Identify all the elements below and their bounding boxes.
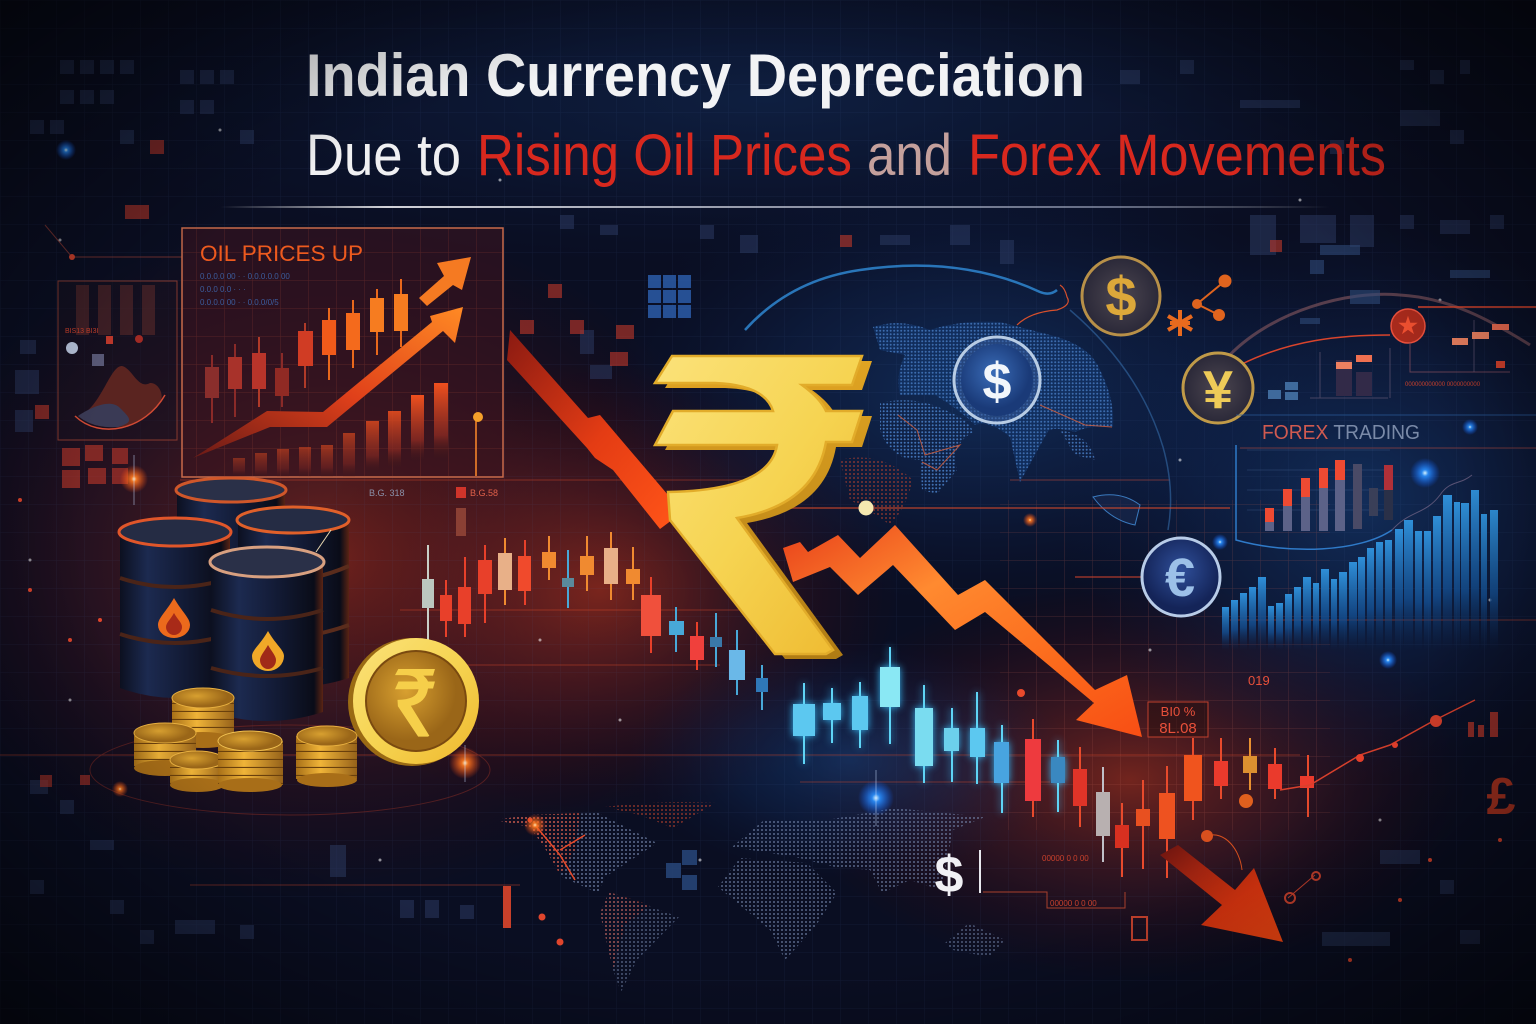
title xyxy=(306,42,1386,188)
panel: small mountain chart xyxy=(58,281,177,440)
barrel: left xyxy=(119,518,231,698)
icon: network nodes xyxy=(1168,274,1232,336)
red data column xyxy=(503,886,511,928)
rupee glyph on coin xyxy=(395,669,435,737)
continent: eurasia xyxy=(873,322,1113,482)
title line 2 xyxy=(306,123,1386,188)
stack xyxy=(170,751,224,792)
panel: red data tables xyxy=(1268,245,1510,400)
icon: red alert badge xyxy=(1391,307,1536,343)
continent: africa xyxy=(880,400,973,494)
title line 2: and xyxy=(867,123,952,188)
title line 2: Due to xyxy=(306,123,461,188)
coin stacks xyxy=(90,688,490,815)
panel: small data labels: B.G.58 xyxy=(470,488,498,498)
barrel: back xyxy=(176,478,286,560)
coin: euro xyxy=(1075,538,1220,616)
rupee extrusion xyxy=(665,361,872,659)
world map: south america xyxy=(600,892,679,992)
label: dollar mark: $ xyxy=(935,846,964,904)
world map: eurasia xyxy=(732,808,985,893)
coin: yen: ¥ xyxy=(1203,360,1233,420)
small red data text: 00000 0 0 00 xyxy=(1050,899,1097,908)
candlesticks xyxy=(205,279,408,423)
panel: red data tables: 000000000000 0000000000 xyxy=(1405,382,1481,388)
world map: north america xyxy=(495,813,657,893)
coin: dollar silver: $ xyxy=(983,353,1012,411)
small data text: 0.0.0.0 00 · · 0.0.0.0.0 00 xyxy=(200,272,290,281)
callout: percent label xyxy=(1148,702,1208,737)
coin: dollar gold xyxy=(1082,257,1160,335)
title line 1: Indian Currency Depreciation xyxy=(306,42,1085,109)
continent: australia outline xyxy=(1093,495,1140,525)
bar chart: forex xyxy=(1265,460,1393,531)
line chart: lower right xyxy=(1017,689,1498,903)
world map behind rupee xyxy=(745,266,1230,530)
coin: yen xyxy=(1183,294,1530,423)
arrow: lower falling arrow xyxy=(1160,845,1283,942)
label: dollar mark xyxy=(935,846,1125,908)
bar chart: blue rising xyxy=(1222,490,1498,650)
small data text xyxy=(200,272,290,307)
blue squares xyxy=(666,850,697,890)
heading: forex trading: FOREX TRADING xyxy=(1262,422,1420,444)
icon: oil drop xyxy=(158,598,190,638)
small label: 019 xyxy=(1248,673,1270,688)
panel: forex trading xyxy=(1222,415,1536,650)
rupee face xyxy=(655,356,862,654)
glow stars xyxy=(56,140,1478,836)
coin: euro: € xyxy=(1165,548,1195,608)
icon: oil drop xyxy=(252,631,284,671)
title line 2: Rising Oil Prices xyxy=(477,123,852,188)
continent: red dotted xyxy=(840,458,913,525)
world map: africa xyxy=(718,858,837,960)
heading: oil prices up: OIL PRICES UP xyxy=(200,241,363,266)
candlesticks: red descending xyxy=(1025,719,1314,878)
callout: percent label: 8L.08 xyxy=(1159,720,1197,737)
coin: dollar gold: $ xyxy=(1105,265,1137,328)
small red data text xyxy=(1042,854,1147,940)
stack xyxy=(296,726,357,787)
panel: oil prices up xyxy=(182,228,503,477)
arrow: upper falling red arrow xyxy=(507,330,672,529)
barrel: right xyxy=(237,507,349,687)
arrow: upper oil arrow xyxy=(419,257,471,306)
icon: pound symbol: £ xyxy=(1487,768,1516,826)
glow star: left panel xyxy=(120,465,148,493)
title line 2: Forex Movements xyxy=(968,123,1386,188)
oil barrels xyxy=(119,478,349,721)
icon: red alert badge: ★ xyxy=(1398,313,1418,338)
lower bars xyxy=(233,383,448,477)
candlesticks: blue descending xyxy=(793,647,1065,813)
panel: small mountain chart: BIS13 BI3I xyxy=(65,328,99,335)
stack xyxy=(172,688,234,748)
callout: percent label: BI0 % xyxy=(1161,704,1196,719)
stack xyxy=(218,731,283,792)
coin: large rupee xyxy=(348,638,479,766)
arrow: main oil arrow xyxy=(193,307,463,458)
arrow: main falling arrow xyxy=(783,525,1142,737)
barrel: front xyxy=(210,547,324,721)
small data text: 0.0.0 0.0 · · · xyxy=(200,285,246,294)
rupee symbol xyxy=(655,356,872,659)
panel: small data labels xyxy=(369,487,498,536)
world map: australia xyxy=(945,923,1005,957)
small red data text: 00000 0 0 00 xyxy=(1042,854,1089,863)
stack xyxy=(134,723,196,776)
candlesticks: middle xyxy=(422,500,874,710)
panel: small data labels: B.G. 318 xyxy=(369,488,405,498)
small data text: 0.0.0.0 00 · · 0.0.0/0/5 xyxy=(200,298,279,307)
continent: southeast asia xyxy=(1060,430,1095,460)
world map: greenland xyxy=(605,802,716,828)
coin: dollar silver xyxy=(954,337,1040,423)
